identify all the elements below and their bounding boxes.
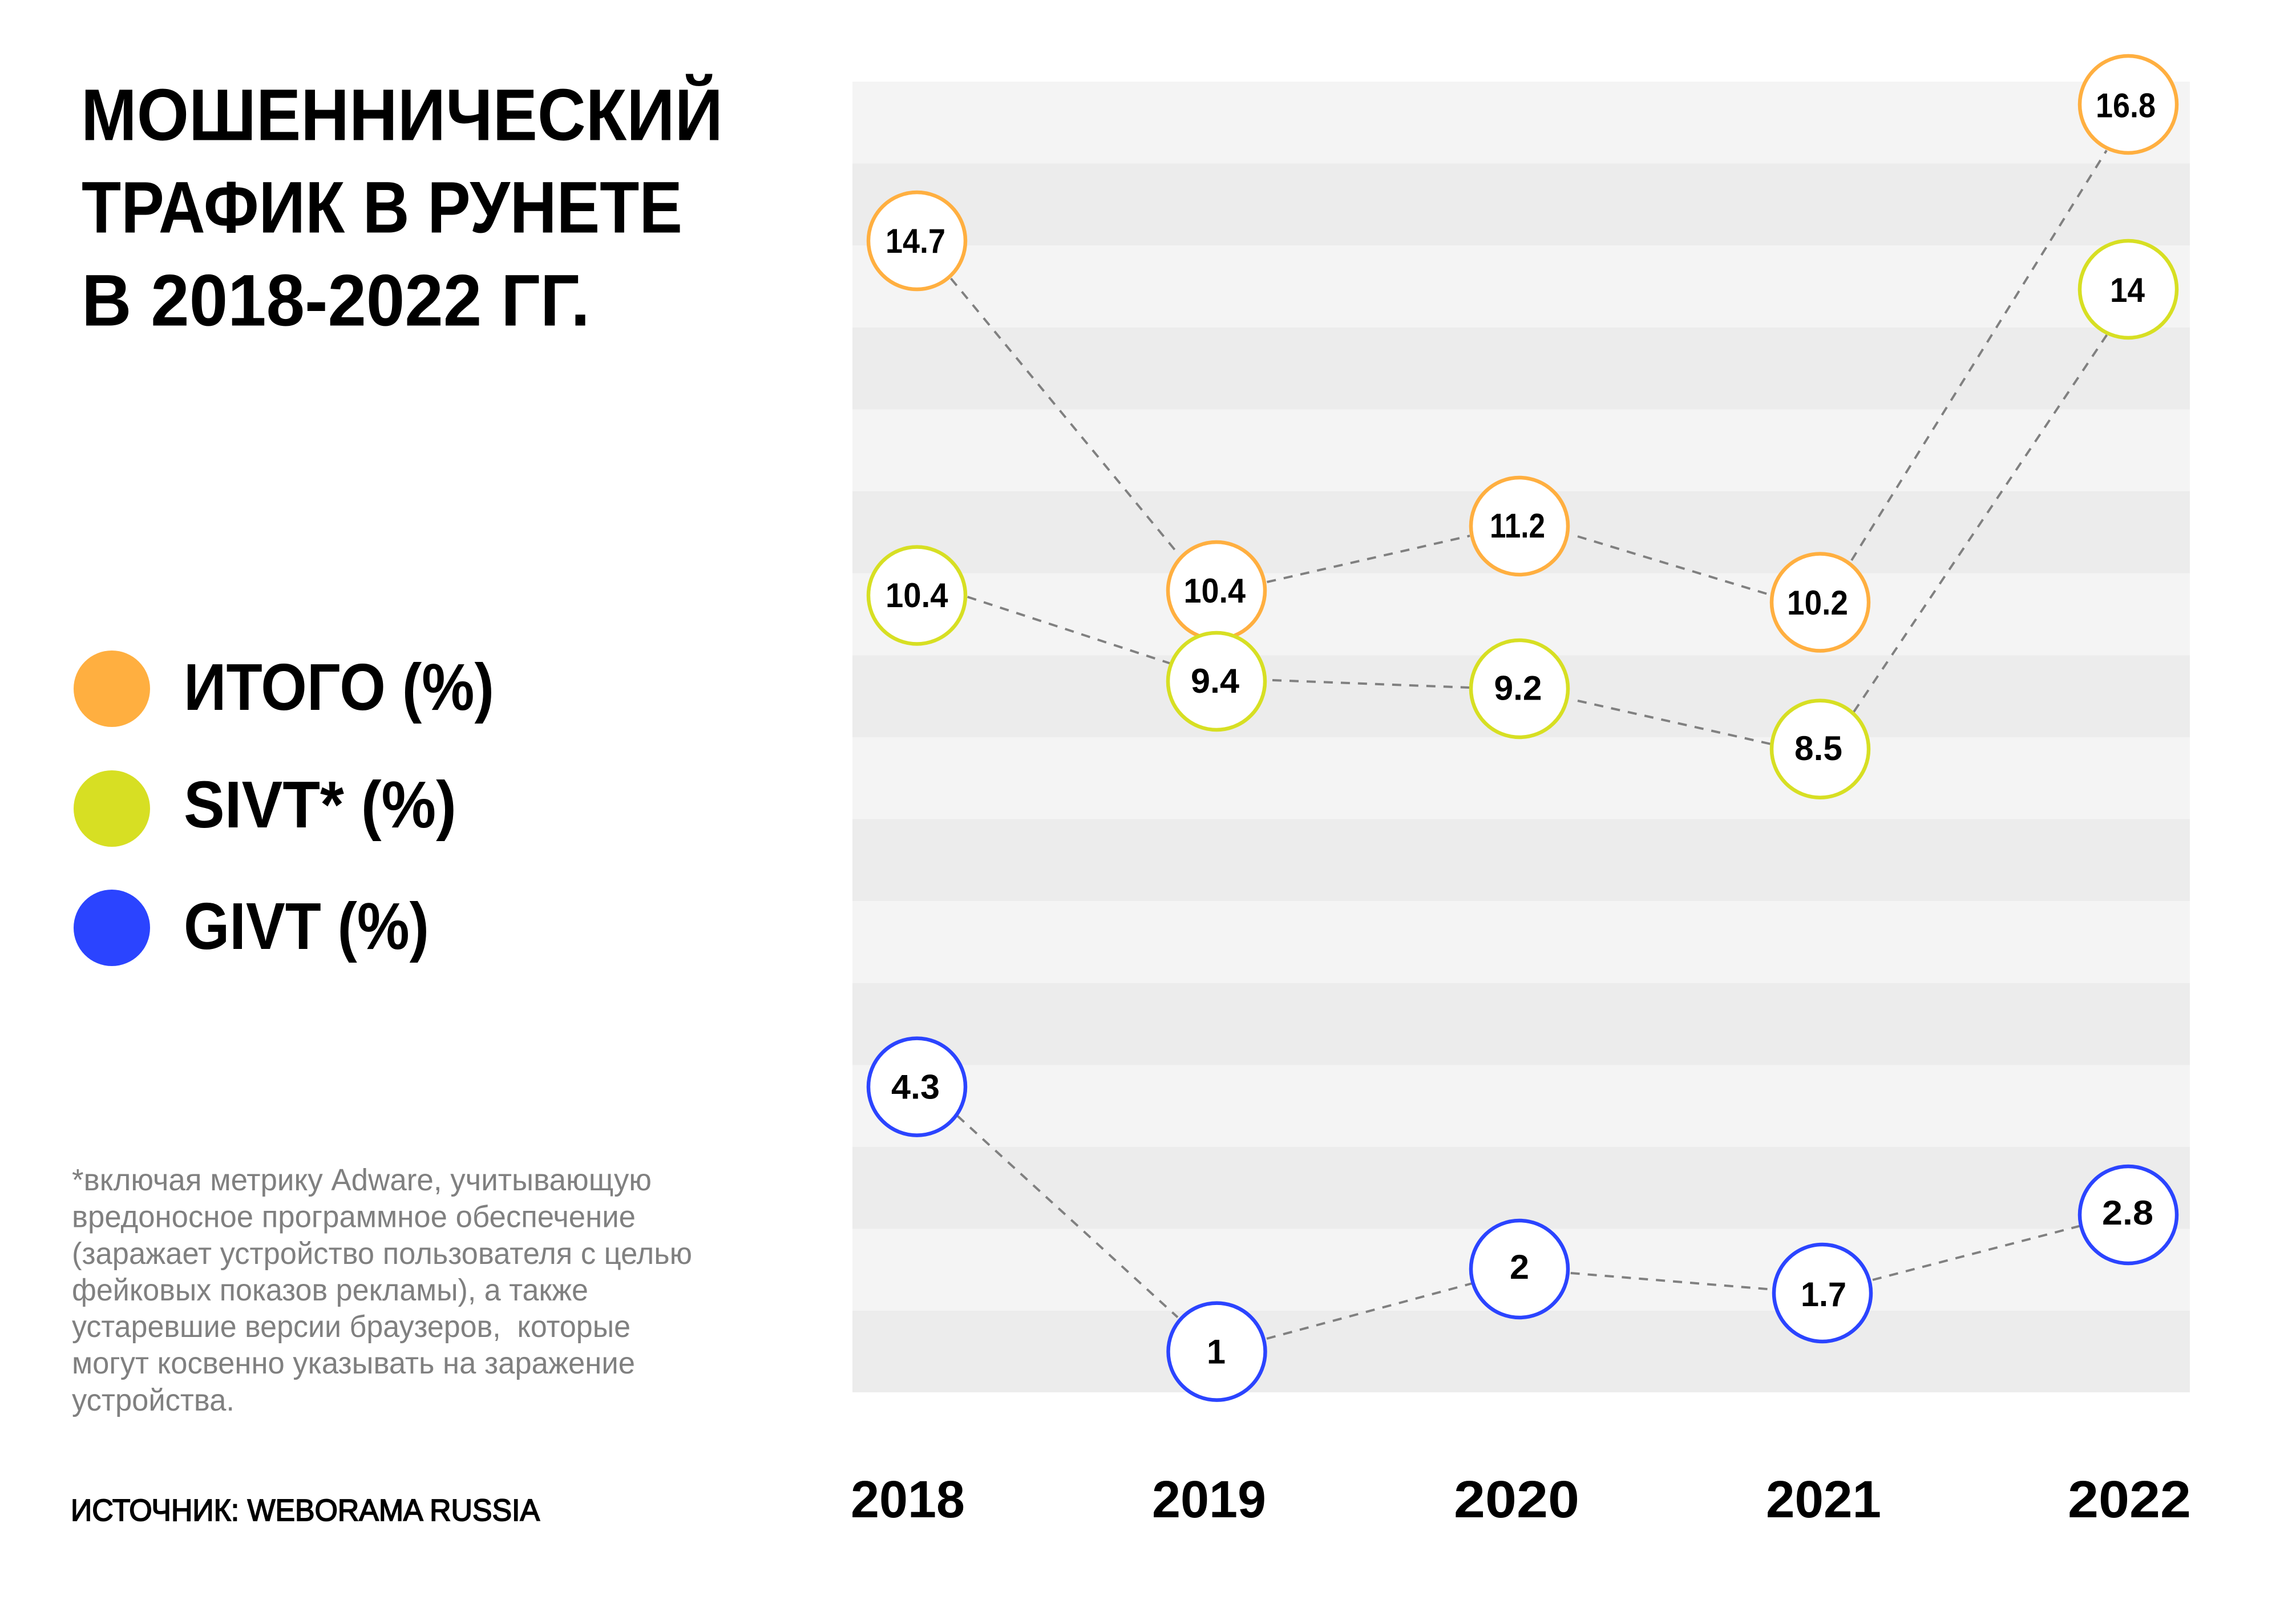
- footnote text: [72, 1163, 692, 1417]
- data point: GIVT 2020 2: 2: [1510, 1248, 1529, 1286]
- background bands: [852, 82, 2190, 1392]
- data point: GIVT 2019 1: [1169, 1303, 1266, 1400]
- data point: SIVT 2020 9.2: 9.2: [1494, 669, 1542, 708]
- x-axis year labels: 2020: [1454, 1470, 1579, 1529]
- data point: GIVT 2022 2.8: [2080, 1166, 2177, 1263]
- footnote text: устаревшие версии браузеров, которые: [72, 1310, 630, 1344]
- data point: ИТОГО 2022 16.8: 16.8: [2096, 87, 2156, 124]
- data point: ИТОГО 2020 11.2: 11.2: [1490, 507, 1545, 545]
- footnote text: (заражает устройство пользователя с целью: [72, 1237, 692, 1271]
- footnote text: могут косвенно указывать на заражение: [72, 1346, 635, 1380]
- data point: SIVT 2018 10.4: 10.4: [886, 576, 948, 615]
- data point: GIVT 2018 4.3: 4.3: [891, 1068, 940, 1106]
- data point: SIVT 2022 14: 14: [2110, 271, 2145, 309]
- data point: ИТОГО 2019 10.4: 10.4: [1183, 572, 1246, 610]
- data point: ИТОГО 2021 10.2: 10.2: [1787, 584, 1848, 622]
- title: МОШЕННИЧЕСКИЙ: [81, 74, 723, 156]
- data point: GIVT 2018 4.3: [868, 1039, 965, 1136]
- data point: ИТОГО 2022 16.8: [2080, 56, 2177, 153]
- footnote text: *включая метрику Adware, учитывающую: [72, 1163, 652, 1197]
- legend item: GIVT: GIVT (%): [184, 889, 429, 963]
- legend item: ИТОГО: [74, 650, 494, 727]
- footnote text: устройства.: [72, 1383, 235, 1417]
- data point: SIVT 2022 14: [2080, 241, 2177, 338]
- data point: SIVT 2021 8.5: [1772, 701, 1869, 798]
- title: В 2018-2022 ГГ.: [82, 260, 590, 341]
- legend item: GIVT: [74, 889, 429, 966]
- data point: GIVT 2020 2: [1471, 1221, 1568, 1318]
- dashed line: GIVT series: [957, 1116, 2081, 1339]
- x-axis year labels: [851, 1470, 2191, 1529]
- data point: SIVT 2018 10.4: [868, 547, 965, 644]
- footnote text: фейковых показов рекламы), а также: [72, 1273, 588, 1307]
- data point: ИТОГО 2018 14.7: 14.7: [886, 222, 945, 260]
- data point: SIVT 2020 9.2: [1471, 640, 1568, 737]
- data point: ИТОГО 2018 14.7: [868, 192, 965, 289]
- x-axis year labels: 2021: [1766, 1470, 1881, 1529]
- footnote text: вредоносное программное обеспечение: [72, 1199, 636, 1234]
- x-axis year labels: 2018: [851, 1470, 965, 1529]
- source: ИСТОЧНИК: WEBORAMA RUSSIA: [71, 1493, 540, 1528]
- legend item: SIVT: SIVT* (%): [184, 767, 456, 842]
- data point: ИТОГО 2021 10.2: [1772, 554, 1869, 651]
- data point: SIVT 2019 9.4: 9.4: [1191, 662, 1240, 700]
- data point: ИТОГО 2019 10.4: [1168, 542, 1265, 639]
- legend item: ИТОГО: ИТОГО (%): [184, 650, 494, 724]
- data point: ИТОГО 2020 11.2: [1471, 478, 1568, 575]
- data point: GIVT 2021 1.7: [1774, 1245, 1871, 1342]
- data point: GIVT 2019 1: 1: [1207, 1333, 1226, 1371]
- data point: SIVT 2021 8.5: 8.5: [1794, 729, 1842, 767]
- x-axis year labels: 2019: [1152, 1470, 1266, 1529]
- title: [81, 74, 723, 341]
- legend: [74, 650, 494, 966]
- title: ТРАФИК В РУНЕТЕ: [82, 167, 682, 249]
- x-axis year labels: 2022: [2068, 1470, 2191, 1529]
- data point: GIVT 2021 1.7: 1.7: [1801, 1275, 1846, 1314]
- legend item: SIVT: [74, 767, 456, 847]
- data point: GIVT 2022 2.8: 2.8: [2102, 1194, 2153, 1232]
- line chart: [852, 56, 2190, 1400]
- data point: SIVT 2019 9.4: [1168, 633, 1265, 730]
- dashed line: SIVT series: [968, 335, 2107, 744]
- dashed line: ИТОГО series: [951, 151, 2107, 595]
